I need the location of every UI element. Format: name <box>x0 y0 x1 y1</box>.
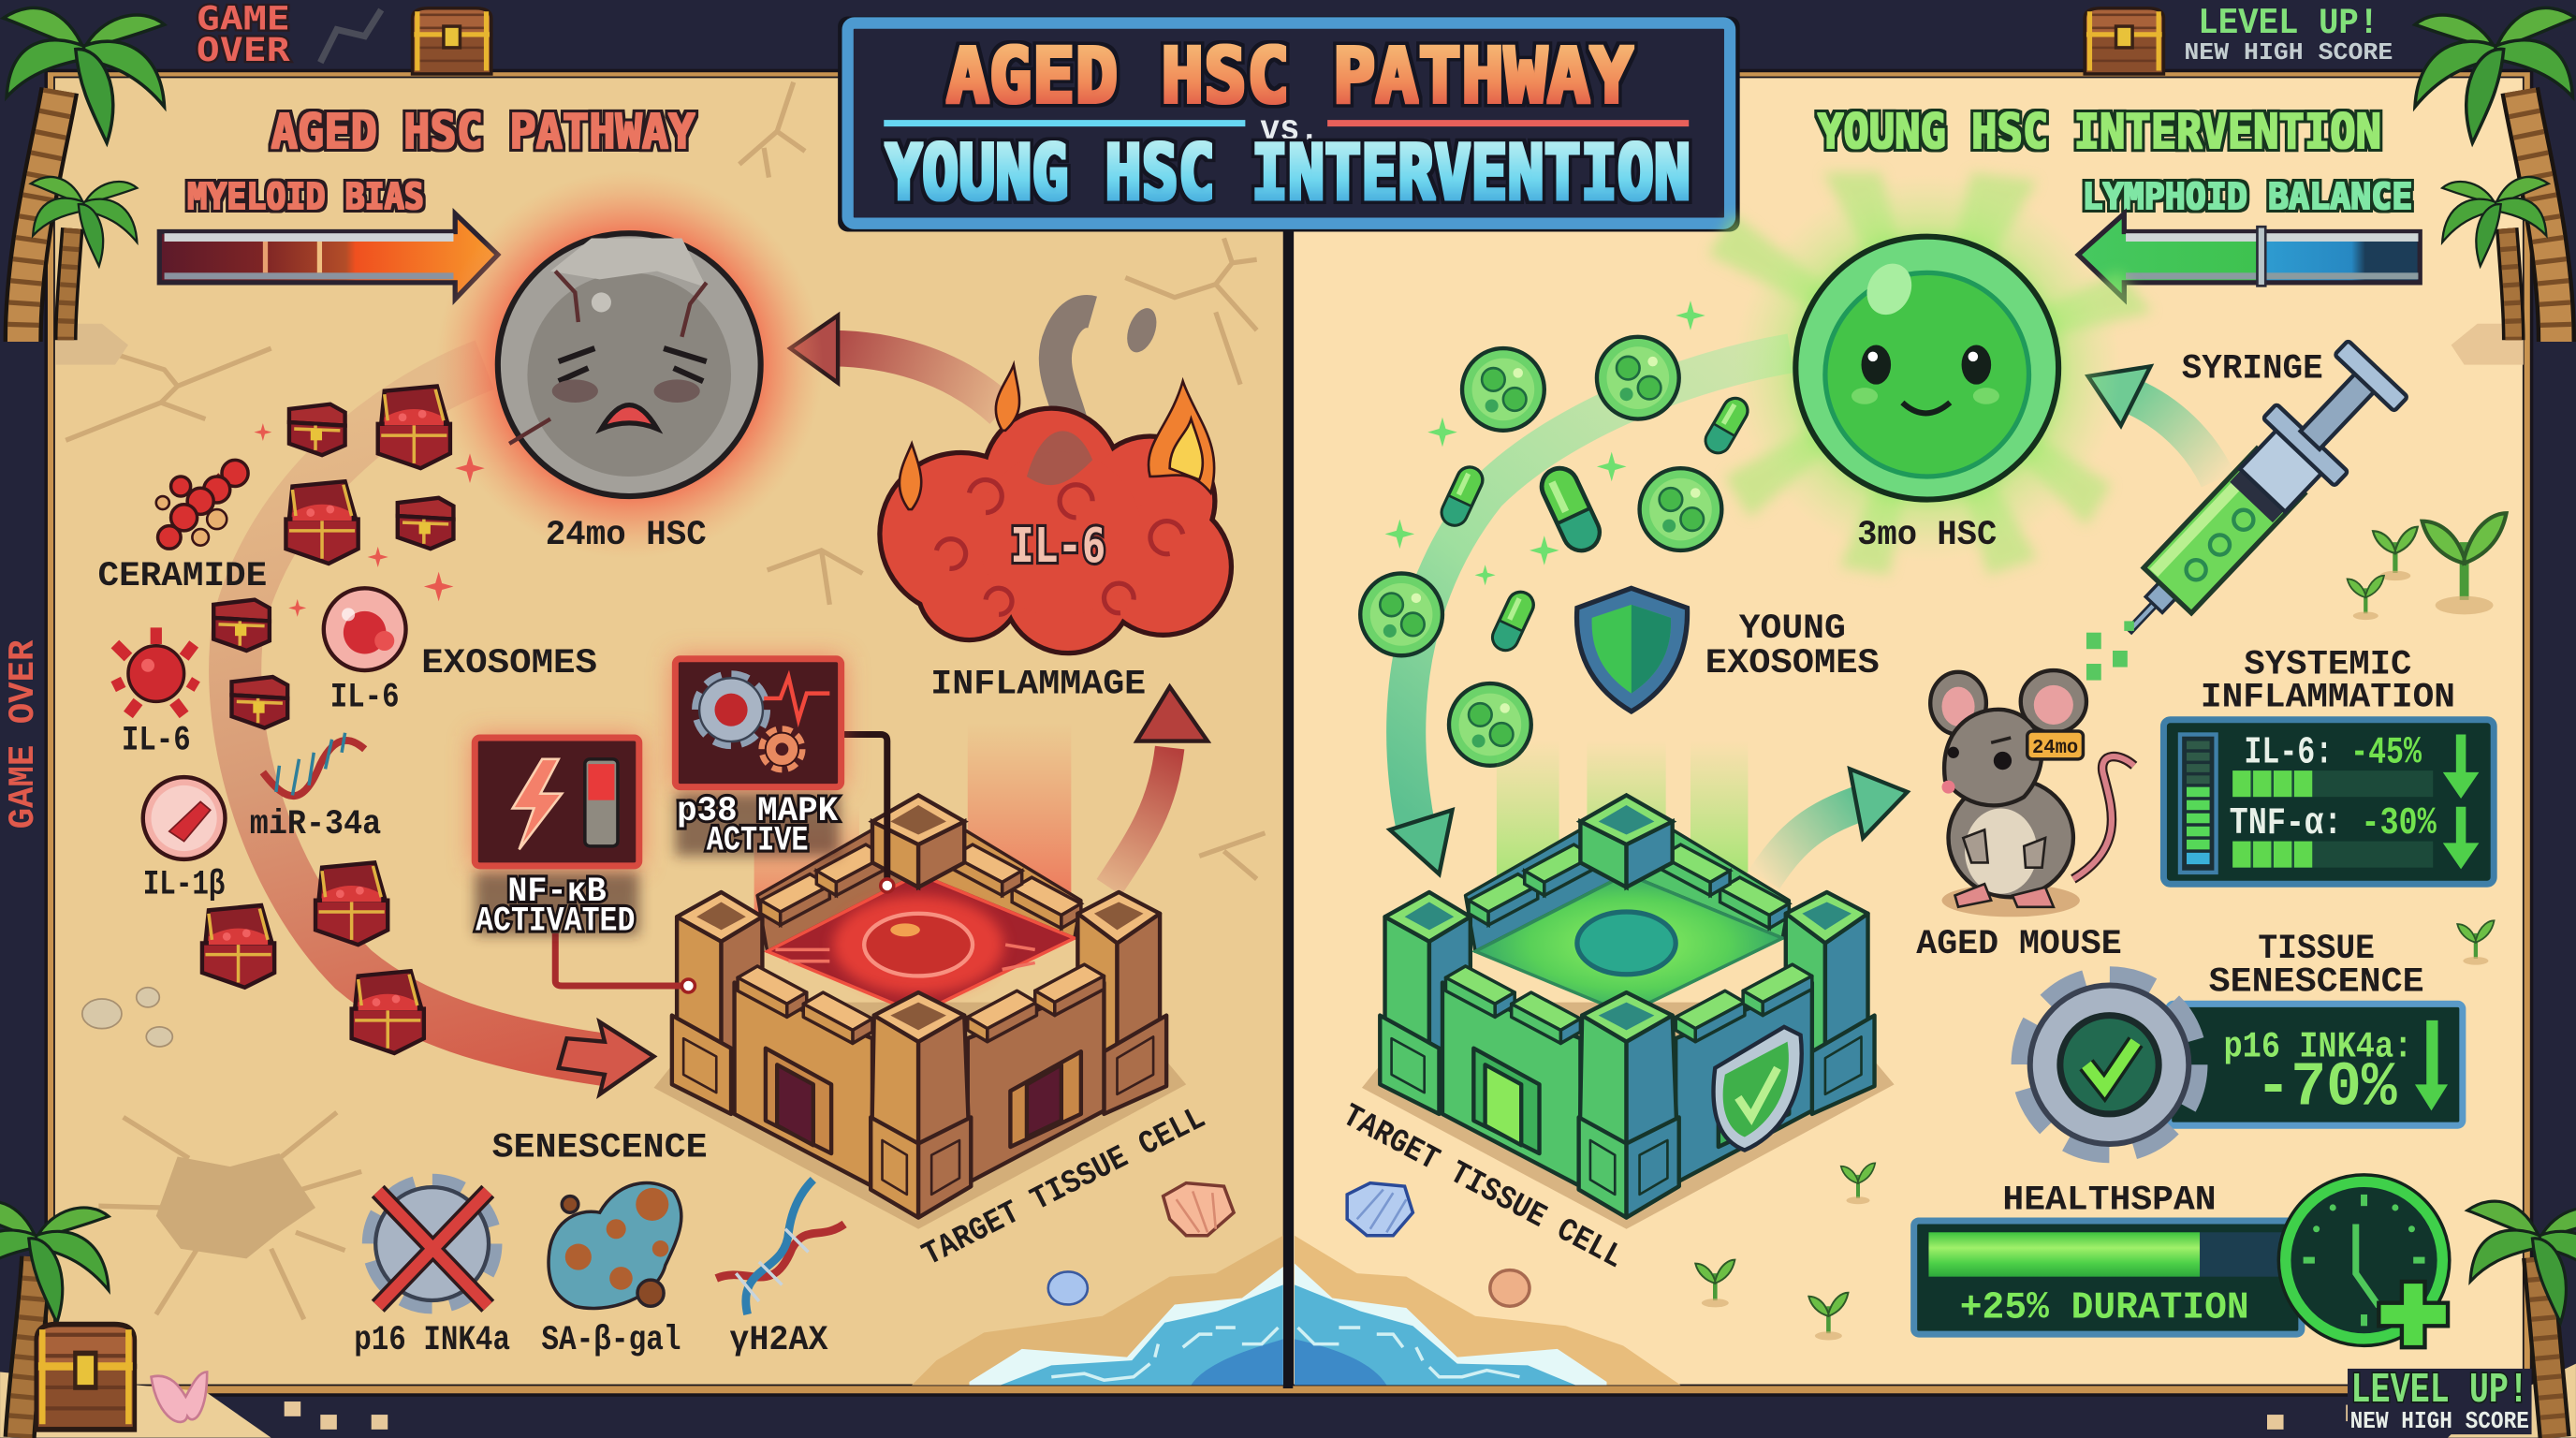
label: myeloid bias: MYELOID BIAS <box>187 176 424 218</box>
icon: inflammation cloud <box>883 411 1229 651</box>
icon: red treasure chests <box>202 386 453 1053</box>
icon: palm tree bottom left <box>0 1201 109 1438</box>
red sparkles <box>254 423 485 617</box>
sea <box>1001 1284 1283 1385</box>
title line 2: YOUNG HSC INTERVENTION <box>886 129 1690 217</box>
mouse age tag: 24mo <box>2032 737 2078 759</box>
front walls and towers <box>672 892 1166 1217</box>
label: IL-6 exosome: IL-6 <box>330 679 400 718</box>
panel: systemic inflammation readout <box>2163 720 2494 884</box>
fortress: young target tissue cell <box>1362 795 1895 1229</box>
label: p38 MAPK: p38 MAPK <box>677 792 839 831</box>
arrow: young exosome path to target cell <box>1390 353 1791 874</box>
back walls and tower <box>1469 795 1789 929</box>
down arrow IL-6 <box>2443 734 2479 799</box>
palm sand base top left <box>56 324 128 365</box>
sand island bottom right <box>2448 1364 2576 1438</box>
fortress floor <box>768 874 1075 1014</box>
level up header: LEVEL UP! <box>2198 3 2378 44</box>
label: p16 INK4a: p16 INK4a <box>354 1321 510 1360</box>
beach: aged side <box>912 1236 1283 1385</box>
label: lymphoid balance: LYMPHOID BALANCE <box>2083 176 2412 218</box>
icon: gear with check <box>2030 985 2188 1144</box>
light beams over aged fortress <box>754 723 1071 920</box>
level up footer: NEW HIGH SCORE <box>2350 1407 2529 1435</box>
label: target tissue cell (aged): TARGET TISSUE CELL <box>916 1099 1211 1274</box>
fortress: aged target tissue cell <box>654 795 1186 1229</box>
readout: -70%: -70% <box>2256 1052 2398 1123</box>
icon: IL-6 spiky particle <box>113 627 198 714</box>
wave highlights <box>1051 1328 1278 1380</box>
label: exosomes: EXOSOMES <box>421 644 597 683</box>
foam <box>970 1267 1283 1385</box>
pebbles on dark border, left <box>285 1401 388 1430</box>
light beams over young fortress <box>1497 741 1748 881</box>
icon: miR-34a strand <box>263 733 365 796</box>
icon: shell (aged side) <box>1164 1183 1234 1236</box>
myeloid bias arrow bar <box>159 213 498 299</box>
down arrow <box>2415 1020 2448 1110</box>
centre divider <box>1283 230 1293 1388</box>
label: exosomes (young): EXOSOMES <box>1705 644 1880 683</box>
panel: young sand background <box>1293 77 2524 1385</box>
droplets from syringe <box>2086 621 2134 681</box>
label: systemic inflammation <box>2201 646 2455 718</box>
label: SA-beta-gal: SA-β-gal <box>541 1321 681 1360</box>
icon: young HSC <box>1734 174 2121 562</box>
icon: young exosomes and capsules <box>1360 337 1752 766</box>
cracked crater <box>156 1153 315 1258</box>
icon: aged mouse <box>1930 670 2134 917</box>
fortress floor <box>1475 874 1782 1014</box>
floor circuit lines <box>775 945 1035 969</box>
game over header <box>197 0 291 69</box>
game over header: OVER <box>197 31 291 69</box>
readout: TNF-alpha: TNF-α: -30% <box>2230 802 2437 845</box>
panel: p38 MAPK active <box>674 657 842 860</box>
icon: smoke <box>1055 304 1162 493</box>
fortress base <box>1362 829 1895 1229</box>
icon: palm tree bottom right <box>2467 1201 2576 1438</box>
icon: syringe <box>2093 335 2414 665</box>
down arrow TNF <box>2443 807 2479 869</box>
versus label: vs. <box>1260 110 1319 151</box>
IL-6 segment bar <box>2232 770 2433 797</box>
game over header: GAME <box>197 0 290 38</box>
p38 connector line <box>838 734 887 884</box>
readout: IL-6: IL-6: -45% <box>2244 731 2422 774</box>
icon: orange shell <box>1490 1270 1530 1306</box>
vertical game over label: GAME OVER <box>3 639 44 829</box>
label: healthspan: HEALTHSPAN <box>2002 1181 2217 1221</box>
icon: blue shell <box>1347 1183 1412 1236</box>
fortress base <box>654 829 1186 1229</box>
icon: chest top left <box>413 8 491 74</box>
arrow: syringe to young HSC <box>2088 366 2217 479</box>
sea <box>1295 1284 1575 1385</box>
title banner <box>838 17 1740 231</box>
panel: tissue senescence readout <box>2169 1004 2463 1125</box>
nucleus <box>1577 912 1676 975</box>
label: IL-1 beta: IL-1β <box>143 866 225 905</box>
readout: +25% duration: +25% DURATION <box>1960 1287 2249 1330</box>
deep sea <box>1191 1339 1283 1385</box>
sand island bottom left <box>0 1372 271 1438</box>
icon: pebble (aged side) <box>1048 1271 1088 1304</box>
panel: healthspan bar <box>1914 1221 2302 1334</box>
mouse age tag <box>2027 731 2083 759</box>
level up footer: LEVEL UP! <box>2351 1366 2528 1415</box>
label: NF-kB: NF-κB <box>507 873 607 912</box>
label: miR-34a: miR-34a <box>250 805 381 844</box>
level up header <box>2184 3 2393 66</box>
heading: young intervention: YOUNG HSC INTERVENTION <box>1818 105 2381 160</box>
icon: chest top right <box>2085 8 2163 74</box>
cyan rule <box>884 120 1245 126</box>
label: 24mo HSC: 24mo HSC <box>546 516 707 555</box>
level up footer <box>2348 1366 2532 1435</box>
icon: shield <box>1577 588 1688 712</box>
palm sand base top right <box>2452 324 2524 365</box>
icon: gamma-H2AX broken DNA <box>716 1180 844 1314</box>
icon: sprouts near syringe <box>2348 513 2507 620</box>
pebbles on dark border, right <box>2267 1405 2365 1430</box>
label: IL-6 left: IL-6 <box>122 721 191 760</box>
icon: IL-1 beta exosome <box>143 777 225 859</box>
decorative scratch <box>320 10 381 63</box>
label: target tissue cell (young): TARGET TISSUE CELL <box>1336 1097 1629 1277</box>
heading: aged pathway: AGED HSC PATHWAY <box>271 105 695 160</box>
icon: small palm top left <box>31 177 137 340</box>
node dots <box>681 879 894 992</box>
arrow: target cell to aged mouse <box>1764 769 1908 879</box>
panel: aged sand background <box>54 77 1284 1385</box>
back walls and tower <box>761 795 1081 929</box>
label: systemic inflammation: SYSTEMIC <box>2244 646 2411 685</box>
icon: ceramide <box>156 460 248 549</box>
lymphoid balance arrow bar <box>2078 213 2420 299</box>
label: tissue senescence: SENESCENCE <box>2209 962 2424 1002</box>
vertical gauge <box>2180 734 2217 873</box>
foam <box>1295 1264 1606 1385</box>
label: 3mo HSC: 3mo HSC <box>1857 516 1997 555</box>
label: gamma-H2AX: γH2AX <box>729 1321 828 1360</box>
label: systemic inflammation: INFLAMMATION <box>2201 679 2455 718</box>
rays behind young HSC <box>1708 172 2152 575</box>
icon: palm tree top right <box>2415 7 2576 342</box>
label: active: ACTIVE <box>707 821 809 860</box>
label: inflammage: INFLAMMAGE <box>930 666 1146 705</box>
icon: flames <box>900 365 1214 509</box>
TNF segment bar <box>2232 842 2433 868</box>
icon: clock with plus <box>2278 1175 2450 1347</box>
icon: chest bottom left <box>37 1325 135 1430</box>
readout: p16: p16 INK4a: <box>2223 1026 2412 1067</box>
label: young: YOUNG <box>1739 609 1846 649</box>
shield on fortress <box>1713 1027 1802 1151</box>
label: tissue senescence <box>2209 930 2424 1002</box>
green sparkles <box>1385 301 1705 585</box>
beach: young side <box>1295 1236 1680 1385</box>
glowing nucleus <box>833 895 1003 994</box>
icon: IL-6 exosome <box>324 588 406 670</box>
label: tissue senescence: TISSUE <box>2258 930 2375 969</box>
label: activated: ACTIVATED <box>476 902 635 941</box>
icon: small palm top right <box>2442 177 2549 340</box>
green fill <box>1928 1232 2200 1277</box>
icon: palm tree top left <box>4 7 165 342</box>
deep sea <box>1295 1339 1386 1385</box>
icon: aged HSC <box>435 171 823 559</box>
wave highlights <box>1298 1328 1519 1377</box>
level up header: NEW HIGH SCORE <box>2184 38 2393 66</box>
pebbles in sand <box>82 988 172 1047</box>
icon: young sprouts in sand <box>1695 920 2495 1340</box>
NF-kB connector line <box>555 933 687 986</box>
label: ceramide: CERAMIDE <box>97 557 267 596</box>
icon: coral <box>152 1372 207 1422</box>
red rule <box>1327 120 1689 126</box>
title line 1: AGED HSC PATHWAY <box>946 33 1633 121</box>
panel: NF-kB activated <box>474 736 641 941</box>
label: aged mouse: AGED MOUSE <box>1916 925 2122 964</box>
label: syringe: SYRINGE <box>2182 350 2323 389</box>
icon: SA-beta-gal blob <box>549 1182 681 1308</box>
front walls and towers <box>1380 892 1875 1217</box>
arrow: inflammage to aged HSC <box>790 315 1003 411</box>
label: senescence: SENESCENCE <box>492 1129 708 1168</box>
arrow: exosome path to target cell <box>235 365 654 1094</box>
icon: p16 gear crossed out <box>375 1187 489 1306</box>
cracks in dry sand <box>66 82 1265 1319</box>
label: IL-6 in cloud: IL-6 <box>1010 519 1105 574</box>
arrow: target cell to inflammage <box>1109 687 1208 888</box>
